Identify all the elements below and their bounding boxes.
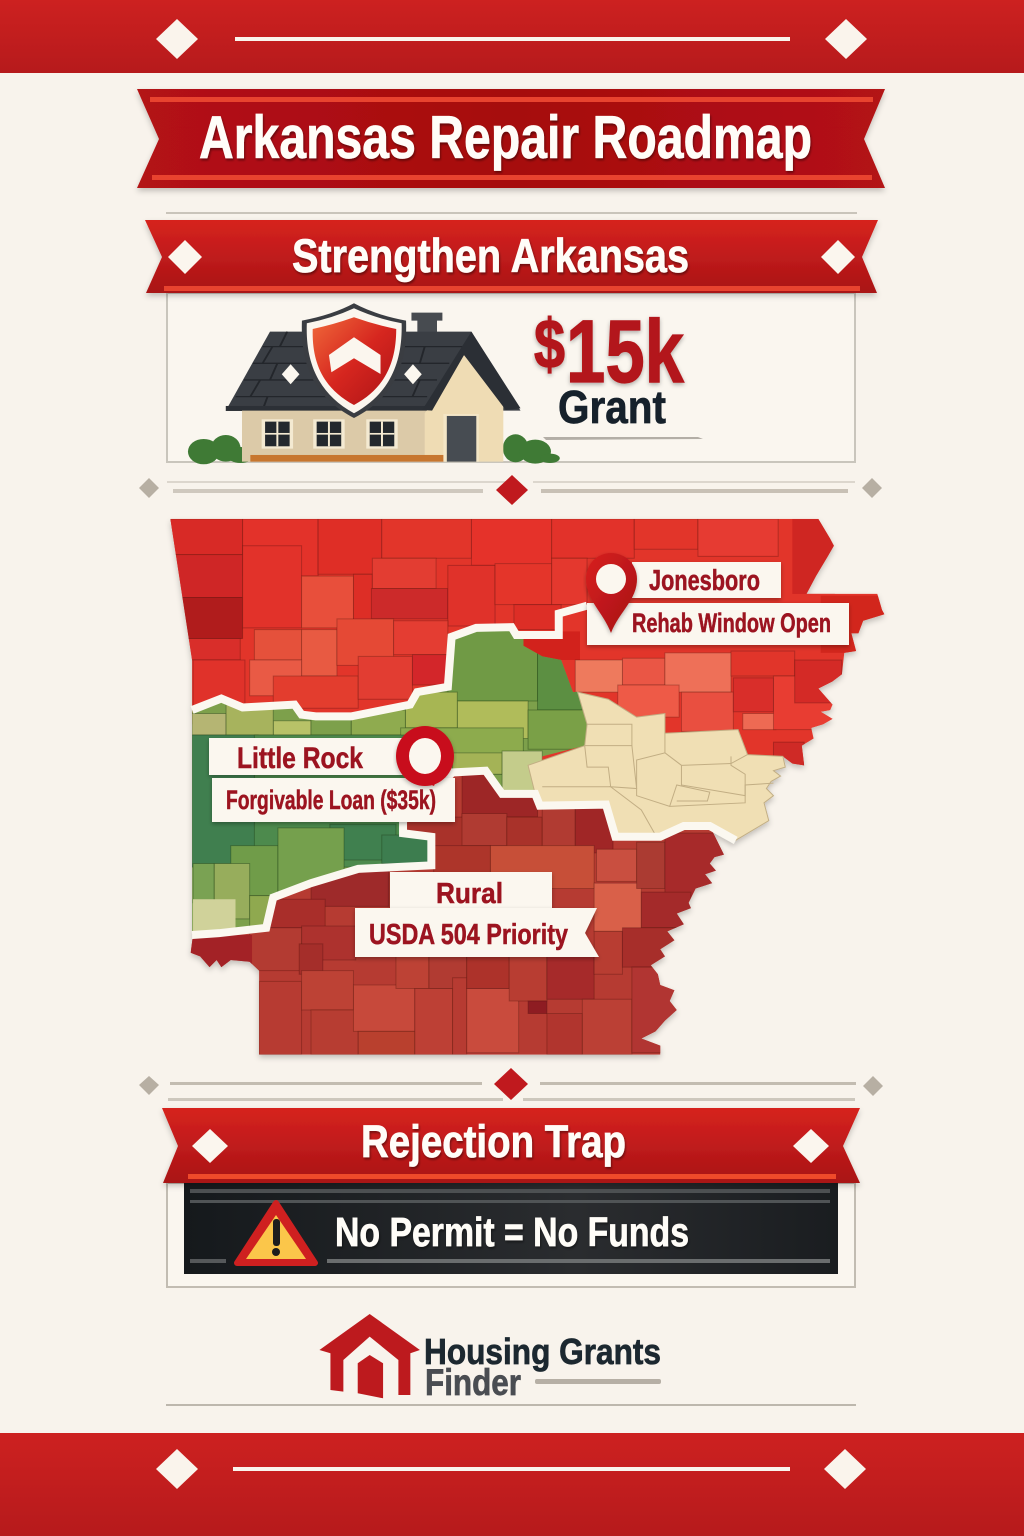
callout: Jonesboro: Jonesboro bbox=[649, 565, 760, 597]
region: north red bbox=[168, 518, 886, 770]
divider bbox=[139, 475, 882, 505]
callout: Jonesboro: Rehab Window Open bbox=[632, 608, 831, 638]
icon: house mark bbox=[319, 1314, 420, 1398]
bottom banner bbox=[0, 1433, 1024, 1536]
icon: map pin bbox=[586, 553, 637, 633]
logo: Housing Grants Finder: Finder bbox=[425, 1362, 521, 1403]
callout: Rural: USDA 504 Priority bbox=[369, 919, 568, 951]
grant amount: 15k bbox=[566, 301, 684, 401]
grant amount bbox=[534, 301, 703, 440]
title ribbon bbox=[137, 89, 885, 188]
panel: Strengthen Arkansas bbox=[145, 220, 878, 464]
callout: Little Rock: Little Rock bbox=[237, 742, 363, 775]
logo: Housing Grants Finder bbox=[319, 1314, 661, 1403]
callout: Rural bbox=[355, 872, 599, 957]
icon: warning triangle bbox=[237, 1203, 315, 1263]
region: beige east bbox=[528, 692, 785, 840]
section ribbon bbox=[162, 1108, 860, 1183]
grant amount: $ bbox=[534, 305, 565, 383]
panel: Rejection Trap bbox=[162, 1108, 860, 1287]
section ribbon bbox=[145, 220, 878, 293]
icon: house with shield bbox=[188, 303, 560, 464]
top banner bbox=[0, 0, 1024, 73]
callout: Jonesboro bbox=[586, 553, 849, 645]
grant amount: Grant bbox=[558, 381, 666, 433]
section ribbon: Rejection Trap bbox=[361, 1116, 626, 1167]
logo: Housing Grants Finder: Housing Grants bbox=[424, 1331, 661, 1372]
divider bbox=[139, 1068, 883, 1101]
region: central green bbox=[188, 624, 594, 939]
title text: Arkansas Repair Roadmap bbox=[199, 104, 812, 171]
callout: Little Rock: Forgivable Loan ($35k) bbox=[226, 785, 436, 815]
callout: Rural: Rural bbox=[436, 878, 503, 910]
map of Arkansas bbox=[160, 510, 896, 1064]
warning bar bbox=[184, 1183, 838, 1274]
region dividers bbox=[192, 606, 736, 935]
region: south brick bbox=[188, 774, 725, 1060]
icon: location ring bbox=[396, 726, 454, 786]
shield bbox=[302, 303, 406, 418]
callout: Little Rock bbox=[209, 726, 455, 822]
section ribbon: Strengthen Arkansas bbox=[292, 229, 689, 282]
warning bar: No Permit = No Funds bbox=[335, 1209, 689, 1255]
